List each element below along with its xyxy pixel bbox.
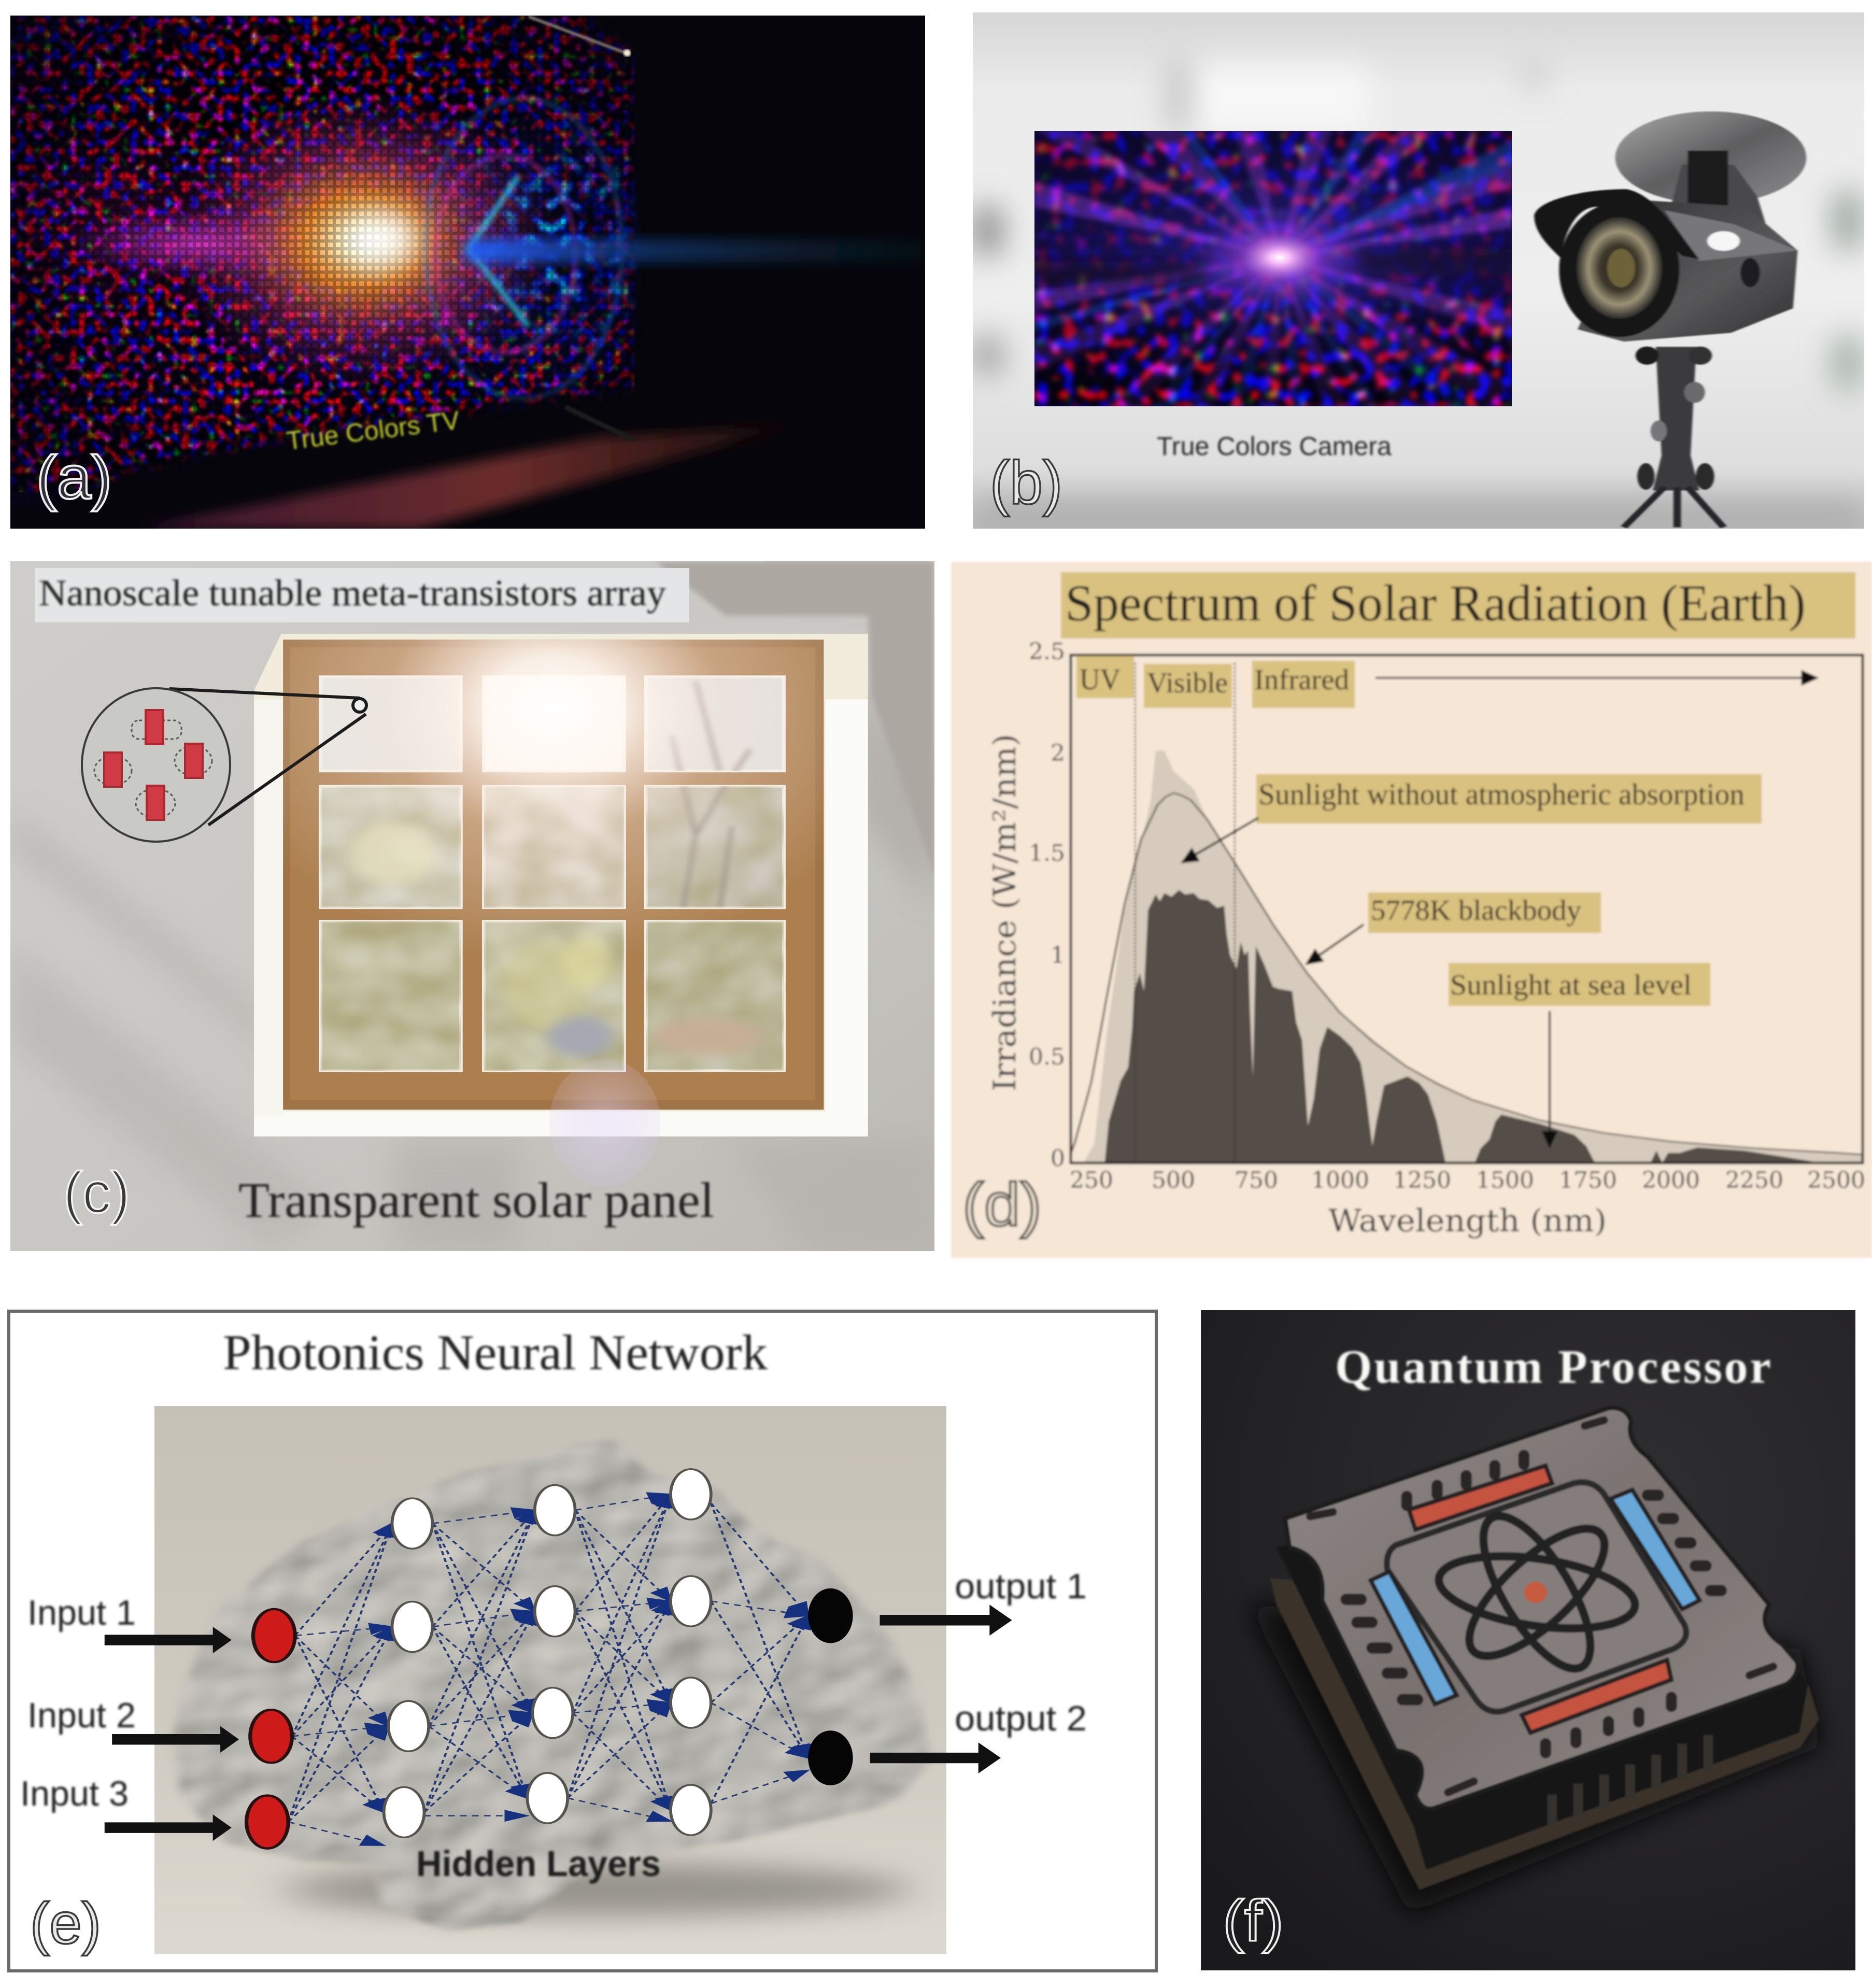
tripod xyxy=(1653,347,1699,490)
UV band label xyxy=(1076,656,1134,698)
input labels: Input 2 xyxy=(27,1696,136,1735)
caption: Hidden Layers: Hidden Layers xyxy=(416,1843,661,1884)
chip drop shadow xyxy=(1249,1604,1821,1914)
label (c): (c) xyxy=(63,1160,130,1225)
nucleus xyxy=(1524,1582,1547,1603)
foliage and trees xyxy=(315,681,792,1075)
x axis tick labels: 1500 xyxy=(1476,1167,1534,1194)
5778K blackbody curve xyxy=(1071,793,1863,1155)
label (b): (b) xyxy=(990,449,1062,517)
x axis tick labels: 2000 xyxy=(1642,1167,1700,1194)
sunlight at sea level xyxy=(1105,890,1820,1163)
chip illustration xyxy=(1249,1408,1821,1914)
network diagram xyxy=(105,1469,1012,1849)
brain photo backdrop xyxy=(154,1406,946,1954)
x axis tick labels xyxy=(1070,1167,1865,1194)
callout: sunlight without atmospheric absorption xyxy=(1256,774,1762,823)
output labels: output 2 xyxy=(955,1699,1087,1738)
side walls with fins xyxy=(1277,1472,1808,1870)
caption: Nanoscale tunable meta-transistors array: Nanoscale tunable meta-transistors array xyxy=(39,572,666,614)
slots xyxy=(1310,1420,1774,1792)
sun glare xyxy=(283,640,824,1110)
Infrared band label xyxy=(1252,661,1355,708)
y axis tick labels: 1 xyxy=(1051,942,1065,969)
input labels xyxy=(20,1593,136,1813)
input and output arrows xyxy=(105,1604,1012,1841)
blue contact bars xyxy=(1371,1490,1699,1704)
callout: sunlight at sea level: Sunlight at sea level xyxy=(1450,969,1692,1001)
x axis tick labels: 2250 xyxy=(1725,1167,1783,1194)
y axis tick labels: 2.5 xyxy=(1029,638,1065,665)
arrow to sea level spectrum xyxy=(1549,1011,1551,1147)
label (f): (f) xyxy=(1223,1888,1284,1953)
output labels xyxy=(955,1567,1087,1738)
y axis tick labels: 0.5 xyxy=(1029,1044,1065,1070)
connections xyxy=(288,1494,808,1845)
blurred room background xyxy=(973,62,1864,529)
top right wall shadow xyxy=(656,561,934,876)
TV stand xyxy=(565,407,635,441)
label (a): (a) xyxy=(36,444,112,512)
y axis tick labels xyxy=(1029,638,1065,1172)
callout: sunlight without atmospheric absorption: Sunlight without atmospheric absorption xyxy=(1258,777,1745,811)
panel (e): photonics neural network xyxy=(9,1311,1156,1971)
plot frame xyxy=(1071,655,1863,1163)
caption strip xyxy=(35,568,689,622)
callout: 5778K blackbody: 5778K blackbody xyxy=(1371,894,1581,927)
Infrared band label: Infrared xyxy=(1254,664,1349,696)
heading: Quantum Processor xyxy=(1335,1340,1771,1393)
input nodes xyxy=(247,1609,295,1849)
heading strip xyxy=(1061,572,1855,638)
x axis title: Wavelength (nm) xyxy=(1328,1203,1607,1239)
horizontal light streak xyxy=(466,239,925,262)
UV band label: UV xyxy=(1080,662,1121,696)
lens flare xyxy=(549,1059,660,1186)
TV top edge highlight xyxy=(529,17,630,54)
x axis tick labels: 1000 xyxy=(1311,1167,1369,1194)
icon: camera on tripod xyxy=(1534,111,1806,527)
output labels: output 1 xyxy=(955,1567,1087,1606)
spectrum chart xyxy=(1071,663,1863,1163)
label (d): (d) xyxy=(962,1171,1042,1239)
input labels: Input 3 xyxy=(20,1774,129,1813)
output nodes xyxy=(808,1588,853,1785)
panel (d): solar spectrum chart xyxy=(951,562,1872,1258)
y axis tick labels: 0 xyxy=(1051,1145,1065,1172)
caption: True Colors Camera: True Colors Camera xyxy=(1157,432,1392,461)
x axis tick labels: 2500 xyxy=(1807,1167,1865,1194)
x axis tick labels: 1750 xyxy=(1559,1167,1617,1194)
top plate xyxy=(1285,1408,1797,1809)
caption: True Colors TV: True Colors TV xyxy=(285,405,461,456)
x axis tick labels: 1250 xyxy=(1393,1167,1451,1194)
inset starburst image xyxy=(1034,131,1512,406)
y axis tick labels: 2 xyxy=(1051,740,1065,766)
wall shadow bands xyxy=(10,674,934,1251)
callout: magnified meta-transistors xyxy=(82,688,366,842)
sunlight without atmospheric absorption xyxy=(1084,750,1863,1163)
heading: Photonics Neural Network xyxy=(223,1325,768,1380)
label (e): (e) xyxy=(30,1891,101,1956)
panel (b): True Colors Camera xyxy=(973,12,1864,529)
atom symbol xyxy=(1435,1500,1639,1684)
y axis tick labels: 1.5 xyxy=(1029,840,1065,867)
band dividers xyxy=(1134,663,1136,1163)
panel (a): True Colors TV xyxy=(0,16,925,529)
caption: Transparent solar panel: Transparent solar panel xyxy=(238,1172,714,1228)
central module xyxy=(1387,1482,1686,1712)
hidden layer nodes xyxy=(384,1469,711,1837)
x axis tick labels: 750 xyxy=(1235,1167,1278,1194)
base plate xyxy=(1270,1578,1819,1890)
arrow to absorption area xyxy=(1182,818,1258,862)
Visible band label: Visible xyxy=(1147,667,1228,699)
arrow to blackbody curve xyxy=(1307,925,1364,964)
input labels: Input 1 xyxy=(27,1593,136,1632)
window panes xyxy=(321,677,784,1071)
arrow: infrared direction xyxy=(1375,677,1817,679)
x axis tick labels: 250 xyxy=(1070,1167,1113,1194)
TV screen with light burst xyxy=(0,16,663,508)
x axis tick labels: 500 xyxy=(1152,1167,1195,1194)
red contact bars xyxy=(1409,1466,1671,1733)
y axis title: Irradiance (W/m²/nm) xyxy=(987,734,1023,1091)
table under the TV xyxy=(137,424,800,529)
callout: sunlight at sea level xyxy=(1449,963,1710,1006)
rings and cyan chevron xyxy=(425,98,622,399)
pins xyxy=(1346,1455,1721,1753)
window frame xyxy=(283,640,824,1110)
window recess xyxy=(254,634,868,1186)
panel (c): transparent solar panel window xyxy=(10,561,934,1251)
panel (f): quantum processor xyxy=(1201,1310,1855,1970)
Visible band label xyxy=(1144,664,1232,708)
heading: Spectrum of Solar Radiation (Earth) xyxy=(1065,574,1806,632)
